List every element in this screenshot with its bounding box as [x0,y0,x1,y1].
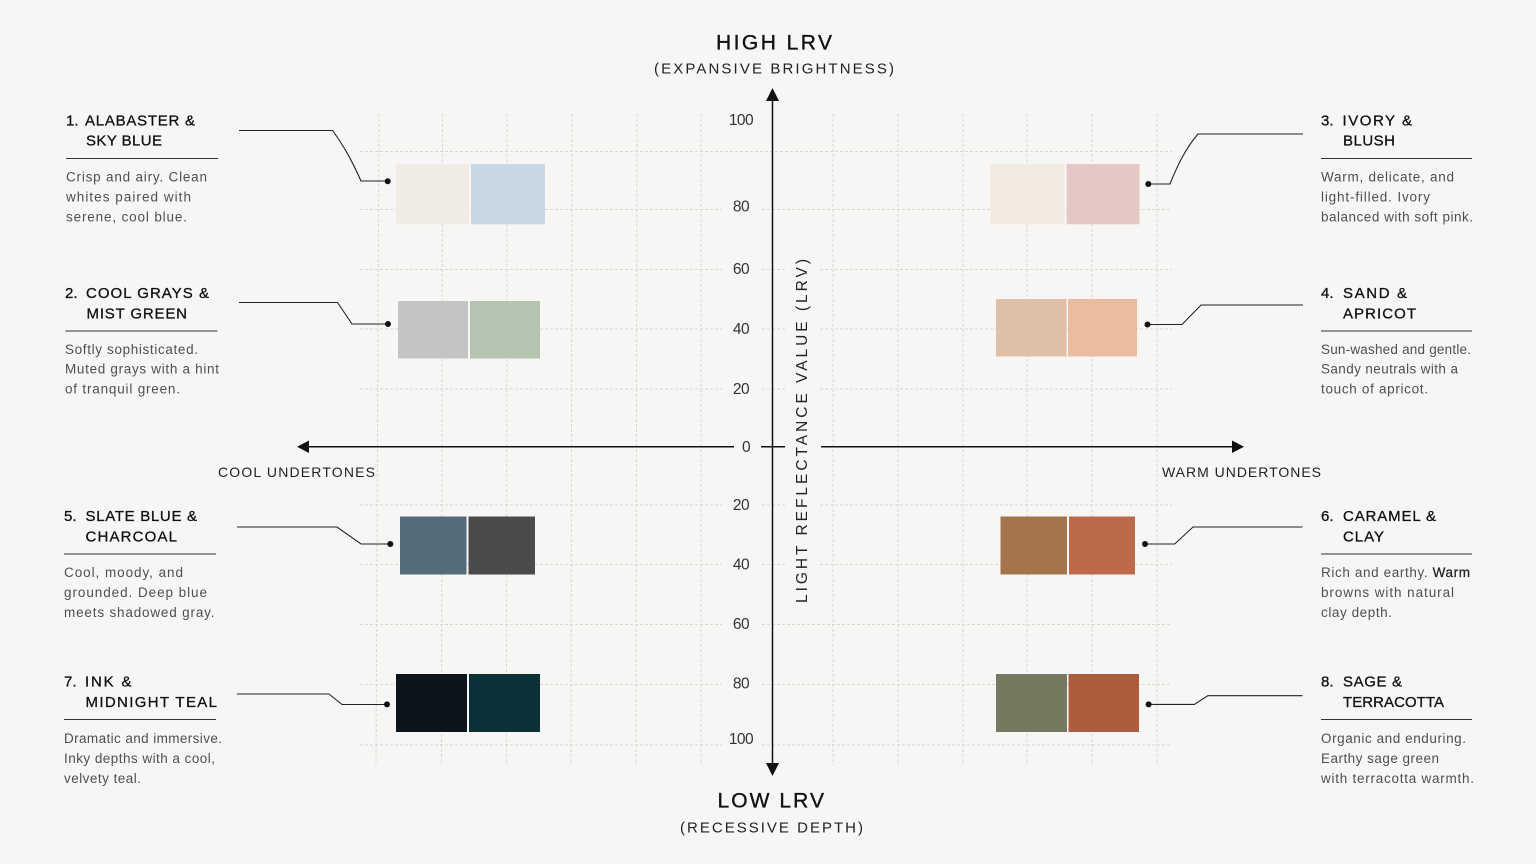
panel: alabaster and sky blue: serene, cool blue. [66,210,187,225]
panel: sand and apricot: Sandy neutrals with a [1321,362,1458,376]
panel: cool grays and mist green: COOL GRAYS & [86,285,209,302]
panel: sand and apricot: APRICOT [1343,306,1416,323]
panel: slate blue and charcoal: CHARCOAL [86,528,177,546]
panel: caramel and clay: browns with natural [1321,585,1454,600]
panel: alabaster and sky blue: whites paired with [65,190,191,205]
panel: sage and terracotta: with terracotta warmth. [1320,771,1474,786]
title: low LRV: (RECESSIVE DEPTH) [680,819,863,836]
axis scale numbers [729,112,754,748]
panel: sage and terracotta: 8. [1321,674,1334,691]
leader line 4 [1144,305,1303,328]
leader line 5 [237,527,393,547]
swatch: alabaster and sky blue [396,164,545,224]
panel: sage and terracotta: Earthy sage green [1321,751,1439,766]
panel: slate blue and charcoal: meets shadowed gray. [64,605,214,620]
panel: ink and midnight teal [64,674,222,786]
vertical axis arrow [761,88,785,776]
panel: sage and terracotta: TERRACOTTA [1343,694,1444,711]
title: low LRV [680,790,863,836]
panel: cool grays and mist green: of tranquil green. [65,382,180,396]
panel: alabaster and sky blue [65,112,218,225]
panel: ivory and blush: 3. [1321,112,1334,129]
leader line 3 [1145,134,1303,187]
swatch: sage and terracotta [996,674,1139,732]
panel: sage and terracotta: SAGE & [1343,674,1402,691]
swatch: cool grays and mist green [398,301,540,358]
axis scale numbers: 40 [733,556,750,574]
panel: sand and apricot: Sun-washed and gentle. [1321,342,1471,357]
panel: cool grays and mist green [65,285,219,396]
axis scale numbers: 60 [733,616,750,633]
swatch: sand and apricot [996,299,1137,356]
title: high LRV: (EXPANSIVE BRIGHTNESS) [654,60,894,77]
panel: caramel and clay [1321,508,1472,620]
panel: sand and apricot [1321,285,1472,396]
panel: sage and terracotta [1320,674,1474,786]
panel: alabaster and sky blue: Crisp and airy. Clean [66,170,207,185]
panel: alabaster and sky blue: 1. [66,112,79,129]
panel: cool grays and mist green: MIST GREEN [86,306,187,323]
horizontal axis arrow: cool [297,440,734,453]
panel: sand and apricot: SAND & [1343,285,1407,302]
panel: ink and midnight teal: 7. [64,674,77,691]
panel: caramel and clay: Rich and earthy. Warm [1321,565,1470,580]
axis label: cool undertones: COOL UNDERTONES [218,464,375,480]
panel: slate blue and charcoal: 5. [64,508,77,525]
axis scale numbers: 80 [733,198,750,216]
panel: ivory and blush: BLUSH [1343,133,1395,150]
panel: ink and midnight teal: MIDNIGHT TEAL [86,694,217,711]
leader line 8 [1146,696,1302,707]
panel: slate blue and charcoal [64,508,216,620]
title: high LRV [654,32,894,77]
panel: cool grays and mist green: Muted grays with a hint [65,362,219,376]
panel: ink and midnight teal: Inky depths with a cool, [64,751,215,766]
panel: caramel and clay: CARAMEL & [1343,508,1436,525]
leader line 1 [239,130,391,184]
axis label: light reflectance value: LIGHT REFLECTANCE VALUE (LRV) [794,259,811,603]
leader line 6 [1142,527,1302,547]
panel: slate blue and charcoal: SLATE BLUE & [86,508,197,525]
axis scale numbers: 0 [742,439,751,456]
swatch: ink and midnight teal [396,674,540,732]
panel: slate blue and charcoal: Cool, moody, and [64,565,183,580]
horizontal axis arrow: warm [821,440,1244,453]
panel: ink and midnight teal: velvety teal. [64,771,141,786]
title: high LRV: HIGH LRV [716,32,832,54]
panel: ivory and blush: light-filled. Ivory [1321,190,1430,205]
panel: ink and midnight teal: Dramatic and immersive. [64,731,222,746]
panel: cool grays and mist green: 2. [65,285,78,302]
axis label: warm undertones: WARM UNDERTONES [1162,464,1321,480]
leader line 2 [239,302,391,327]
panel: alabaster and sky blue: SKY BLUE [86,133,162,150]
panel: ivory and blush: IVORY & [1342,112,1412,129]
panel: ink and midnight teal: INK & [85,674,132,691]
panel: alabaster and sky blue: ALABASTER & [85,112,195,129]
panel: sage and terracotta: Organic and enduring. [1321,731,1466,746]
swatch: ivory and blush [990,164,1140,224]
axis scale numbers: 20 [733,381,750,398]
axis scale numbers: 100 [729,112,754,129]
axis scale numbers: 40 [733,321,750,338]
grid lines [360,114,1172,765]
panel: caramel and clay: clay depth. [1321,605,1392,620]
panel: sand and apricot: touch of apricot. [1321,382,1428,396]
panel: caramel and clay: CLAY [1343,528,1384,546]
panel: slate blue and charcoal: grounded. Deep blue [64,585,207,600]
axis scale numbers: 80 [733,676,750,693]
axis scale numbers: 100 [729,731,754,748]
panel: ivory and blush [1321,112,1473,225]
leader line 7 [237,694,390,707]
panel: ivory and blush: balanced with soft pink. [1321,210,1473,225]
swatch: slate blue and charcoal [400,516,535,574]
axis scale numbers: 60 [733,261,750,278]
title: low LRV: LOW LRV [718,790,824,813]
axis scale numbers: 20 [733,497,750,514]
panel: ivory and blush: Warm, delicate, and [1321,170,1454,185]
panel: cool grays and mist green: Softly sophisticated. [65,342,198,357]
panel: caramel and clay: 6. [1321,508,1334,525]
panel: sand and apricot: 4. [1321,285,1334,302]
swatch: caramel and clay [1000,516,1135,574]
